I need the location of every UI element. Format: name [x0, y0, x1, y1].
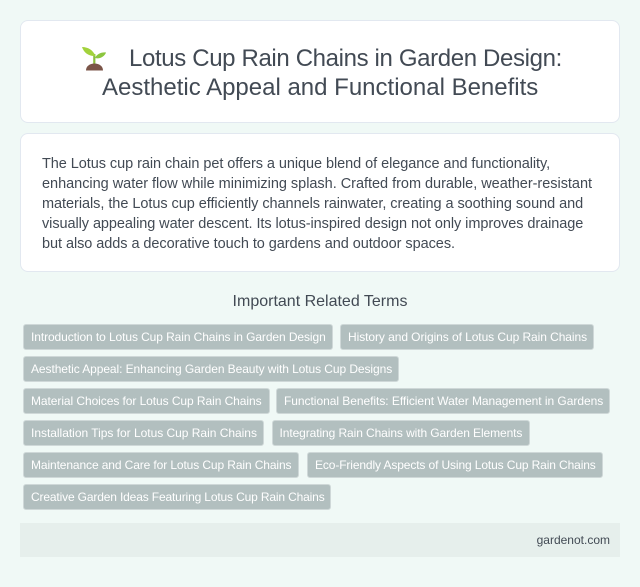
tag: [276, 388, 610, 414]
tag: Aesthetic Appeal: Enhancing Garden Beauty with Lotus Cup Designs: [31, 362, 392, 376]
tag: Introduction to Lotus Cup Rain Chains in Garden Design: [31, 330, 326, 344]
icon: seedling: [82, 47, 106, 70]
panel: description: [20, 133, 620, 272]
tag: Installation Tips for Lotus Cup Rain Chains: [31, 426, 257, 440]
panel: related term tags: [23, 324, 610, 510]
tag: Maintenance and Care for Lotus Cup Rain Chains: [31, 458, 291, 472]
footer: gardenot.com: [537, 533, 610, 547]
footer: [20, 523, 620, 557]
tag: [23, 324, 333, 350]
description text: The Lotus cup rain chain pet offers a unique blend of elegance and functionality,: [42, 156, 550, 172]
tag: Material Choices for Lotus Cup Rain Chains: [31, 394, 262, 408]
tag: [23, 356, 399, 382]
description text: visually appealing water descent. Its lotus-inspired design not only improves drainage: [42, 216, 583, 232]
tag: Creative Garden Ideas Featuring Lotus Cup Rain Chains: [31, 490, 325, 504]
tag: [340, 324, 594, 350]
heading: important related terms: Important Related Terms: [233, 293, 407, 310]
title: Lotus Cup Rain Chains in Garden Design:: [129, 45, 562, 72]
description text: [42, 156, 592, 252]
tag: Integrating Rain Chains with Garden Elements: [280, 426, 522, 440]
tag: [272, 420, 530, 446]
title: Aesthetic Appeal and Functional Benefits: [102, 74, 538, 101]
description text: enhancing water flow while minimizing splash. Crafted from durable, weather-resistant: [42, 176, 592, 192]
tag: [23, 452, 299, 478]
tag: [307, 452, 603, 478]
tag: Functional Benefits: Efficient Water Management in Gardens: [284, 394, 603, 408]
tag: Eco-Friendly Aspects of Using Lotus Cup Rain Chains: [315, 458, 596, 472]
description text: materials, the Lotus cup efficiently channels rainwater, creating a soothing sound and: [42, 196, 583, 212]
tag: [23, 388, 270, 414]
tag: [23, 484, 331, 510]
description text: but also adds a decorative touch to gardens and outdoor spaces.: [42, 236, 455, 252]
title: [102, 45, 562, 101]
tag: History and Origins of Lotus Cup Rain Chains: [348, 330, 587, 344]
panel: title card: [20, 20, 620, 123]
tag: [23, 420, 264, 446]
